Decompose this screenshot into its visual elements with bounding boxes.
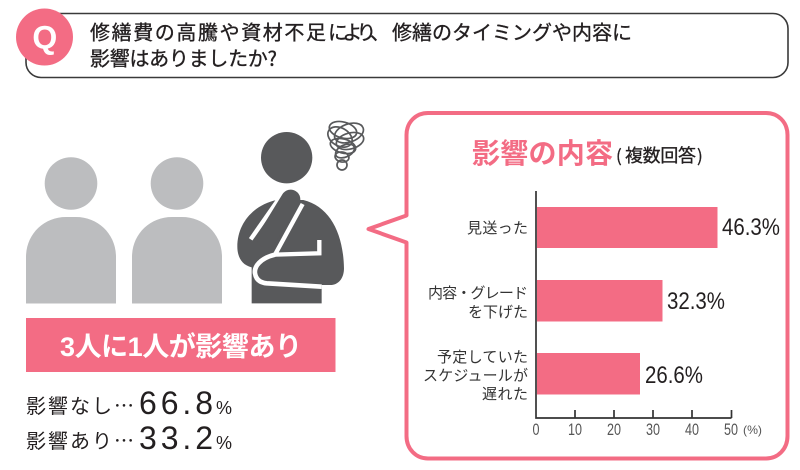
icon: tangled thought scribble (324, 119, 366, 170)
category labels: スケジュールが (423, 364, 528, 386)
question text: 影響はありましたか? (90, 42, 277, 72)
value labels: 26.6% (645, 362, 703, 389)
stat: impact: 33.2 (139, 420, 213, 456)
question text (90, 16, 632, 72)
icon: Q badge: Q (32, 20, 57, 56)
chart title: 影響の内容 (472, 132, 613, 172)
icon: Q badge (16, 8, 73, 66)
question text: 修繕のタイミングや内容に (392, 16, 632, 46)
stat: no impact: 影響なし… (26, 390, 134, 419)
axis tick labels: 20 (607, 420, 621, 439)
stat: no impact: 66.8 (139, 385, 213, 421)
value labels (645, 214, 780, 389)
axis tick labels: 40 (685, 420, 699, 439)
stat: no impact: % (216, 398, 232, 418)
question text: 修繕費の高騰や資材不足 (90, 16, 326, 46)
value labels: 32.3% (667, 288, 725, 315)
panel: impact details speech bubble (368, 113, 788, 458)
axis tick labels: 30 (646, 420, 660, 439)
chart title: ( (616, 142, 622, 167)
category labels: を下げた (468, 301, 528, 322)
chart title: ) (697, 142, 703, 167)
stat: impact: % (216, 433, 232, 453)
banner: headline result: 3人に1人が影響あり (60, 331, 302, 362)
axis tick labels: (%) (743, 423, 762, 437)
icon: affected person with arm across chest (237, 132, 344, 303)
stat: impact (26, 420, 232, 456)
question text: により、 (328, 16, 390, 46)
axis tick labels: 50 (724, 420, 738, 439)
category labels: 予定していた (437, 346, 528, 367)
axis tick labels: 0 (532, 420, 540, 439)
banner: headline result (26, 318, 336, 372)
icon: unaffected person 2 (132, 157, 222, 304)
stat: impact: 影響あり… (26, 425, 134, 454)
axes (536, 191, 732, 418)
chart title: 複数回答 (625, 142, 696, 168)
category labels: 見送った (467, 217, 528, 238)
axis tick labels (532, 420, 762, 439)
bar chart (423, 191, 780, 439)
value labels: 46.3% (722, 214, 780, 241)
question box (16, 8, 788, 78)
category labels: 内容・グレード (428, 282, 528, 303)
axis tick labels: 10 (568, 420, 582, 439)
category labels (423, 217, 528, 404)
stat: no impact (26, 385, 232, 421)
icon: unaffected person 1 (26, 157, 116, 304)
chart title (472, 132, 703, 172)
bars (537, 207, 718, 394)
category labels: 遅れた (482, 383, 528, 404)
